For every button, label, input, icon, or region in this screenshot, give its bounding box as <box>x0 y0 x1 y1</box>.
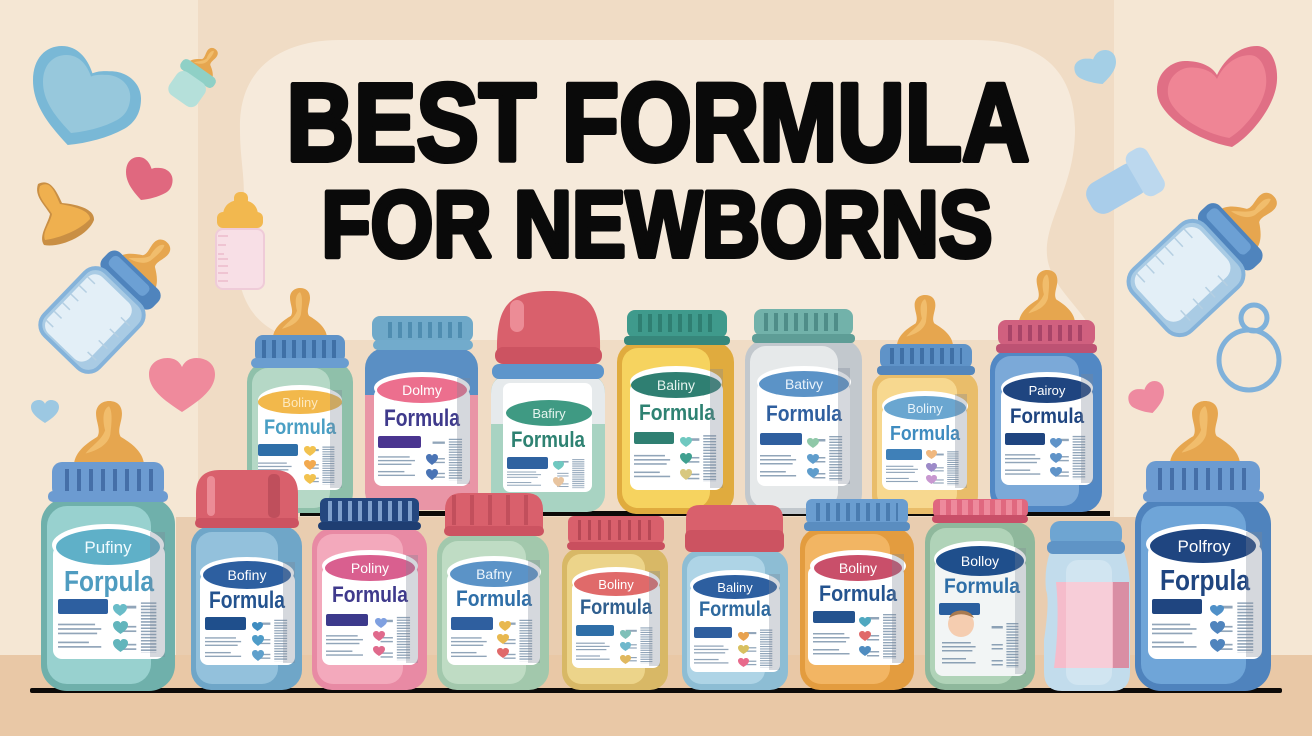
jar: green with yellow oval: Formula <box>264 416 336 439</box>
icon: big pink heart <box>1157 46 1277 147</box>
jar: red cap with white body: Bafiry <box>532 406 566 421</box>
jar: sky blue with red cap: Formula <box>699 598 771 621</box>
jar: large teal bottle: Forpula <box>64 566 155 598</box>
jar: orange with blue cap: Boliny <box>839 560 877 576</box>
jar: sky blue with red cap <box>682 505 788 690</box>
jar: yellow <box>617 310 734 514</box>
jar: sky blue with red cap: Baliny <box>717 580 753 595</box>
jar: large blue bottle: Forpula <box>1160 565 1251 597</box>
decorative icons left <box>31 37 264 423</box>
jar: light blue with red cap <box>191 470 302 690</box>
shelf lines <box>30 511 1282 693</box>
jar: red cap with white body: Formula <box>511 427 586 452</box>
decorative icons right <box>1074 46 1302 413</box>
jar: blue and pink <box>365 316 478 510</box>
jar: cream bottle <box>872 295 978 514</box>
jar: blue and pink: Dolmy <box>402 382 442 398</box>
jar: pale yellow with red cap: Formula <box>580 596 652 619</box>
icon: pink bottle <box>216 192 264 289</box>
jar: pink with navy cap: Formula <box>332 582 409 607</box>
baby photo <box>948 610 974 637</box>
jar: large teal bottle <box>41 401 175 691</box>
jar: orange with blue cap: Formula <box>819 581 898 606</box>
clear bottle with pink liquid <box>1044 521 1130 691</box>
icon: pink heart <box>126 157 173 200</box>
jar: silver: Bativy <box>785 376 823 392</box>
jar: sage with baby photo: Bolloy <box>961 553 999 569</box>
title: BEST FORMULA <box>286 62 1030 184</box>
jar: yellow: Baliny <box>657 377 695 393</box>
icon: small pink heart <box>1128 381 1164 413</box>
jar: orange with blue cap <box>800 499 914 690</box>
jar: pale yellow with red cap <box>562 516 668 690</box>
icon: small blue heart <box>31 400 59 423</box>
icon: large bottle left <box>34 216 194 378</box>
jar: green with red cap: Bafny <box>476 566 512 582</box>
jar: light blue with red cap: Formula <box>209 587 286 614</box>
jar: green with red cap <box>437 493 549 690</box>
subtitle line: FOR NEWBORNS <box>322 172 992 276</box>
jar: yellow: Formula <box>639 400 716 425</box>
jar: sage with baby photo <box>925 499 1035 690</box>
title <box>286 62 1030 276</box>
jar: blue with pink cap: Pairoy <box>1029 383 1066 398</box>
jar: cream bottle: Formula <box>890 423 961 445</box>
jar: silver <box>745 309 862 514</box>
jar: blue and pink: Formula <box>384 405 461 432</box>
icon: small blue heart <box>1074 50 1116 84</box>
jar: large blue bottle: Polfroy <box>1178 537 1231 556</box>
jar: silver: Formula <box>766 401 843 426</box>
jar: green with yellow oval <box>247 288 353 513</box>
icon: orange teat <box>37 182 94 245</box>
jar: sage with baby photo: Formula <box>944 575 1020 598</box>
icon: pink heart lower <box>149 358 215 412</box>
jar: cream bottle: Boliny <box>907 401 943 416</box>
jar: red cap with white body <box>491 291 605 512</box>
icon: pacifier ring <box>1219 305 1279 390</box>
back row of formula containers <box>247 270 1102 514</box>
front row of formula containers <box>41 401 1271 691</box>
jar: pale yellow with red cap: Boliny <box>598 577 634 592</box>
icon: large bottle right <box>1122 165 1302 342</box>
jar: blue with pink cap <box>990 270 1102 512</box>
jar: large teal bottle: Pufiny <box>84 538 132 557</box>
jar: blue with pink cap: Formula <box>1010 405 1084 428</box>
jar: pink with navy cap: Poliny <box>351 560 389 576</box>
jar: large blue bottle <box>1135 401 1271 691</box>
jar: pink with navy cap <box>312 498 427 690</box>
jar: green with red cap: Formula <box>456 586 533 611</box>
icon: blue heart <box>33 46 141 145</box>
icon: blue teat <box>1077 144 1168 226</box>
jar: green with yellow oval: Boliny <box>282 395 318 410</box>
jar: light blue with red cap: Bofiny <box>228 567 266 583</box>
icon: small bottle <box>163 37 232 112</box>
